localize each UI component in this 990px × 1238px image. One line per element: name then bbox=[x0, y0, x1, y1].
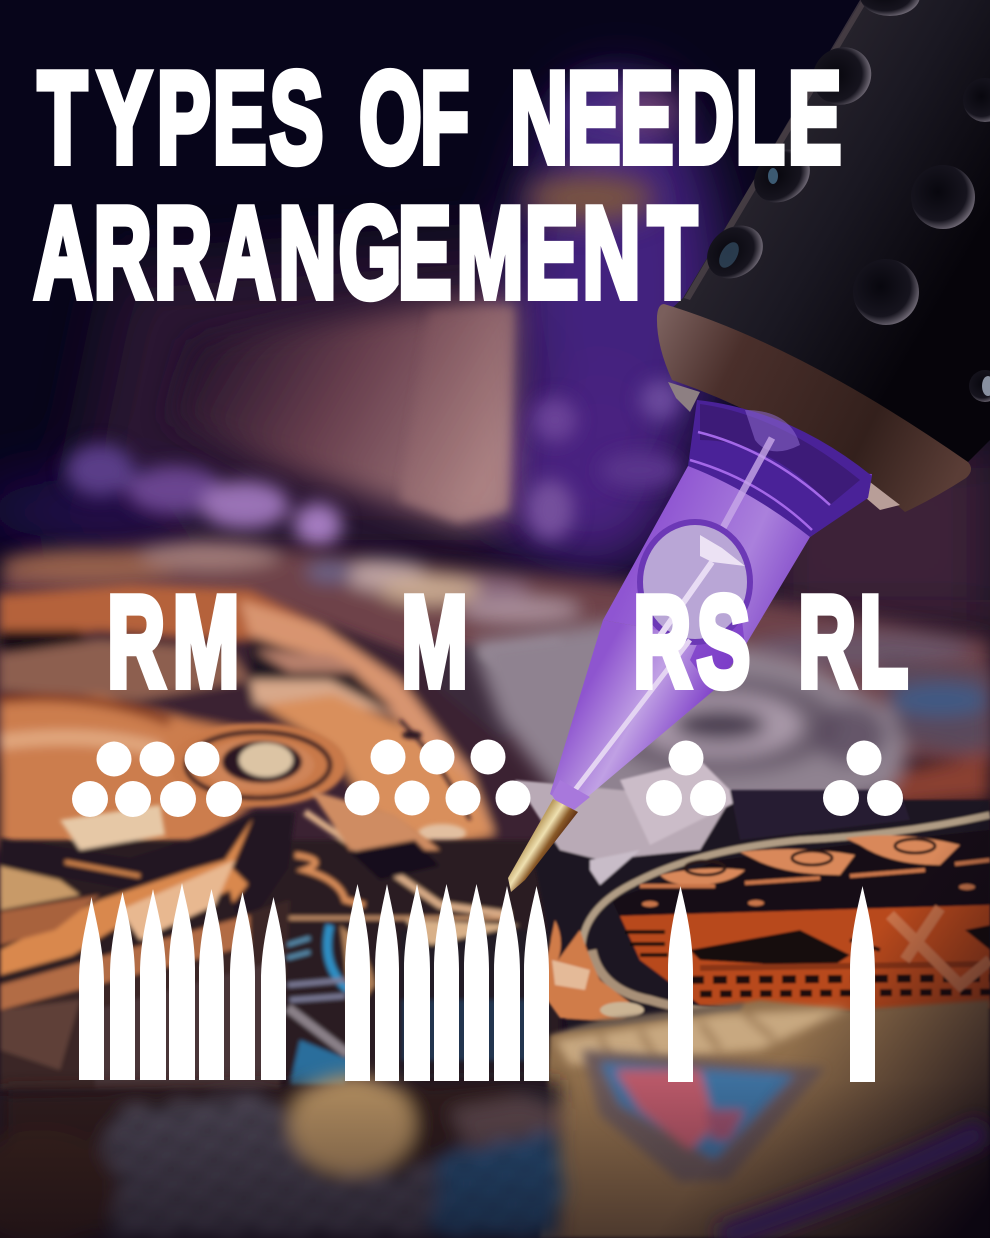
artwork: tan stripes and paper bbox=[540, 1000, 990, 1238]
heading: RL: RL bbox=[798, 569, 908, 714]
tattoo machine copper collar bbox=[657, 304, 971, 512]
icon: RS needle bbox=[668, 886, 693, 1082]
icon: RM needle group bbox=[79, 883, 286, 1080]
icon: RL needle bbox=[850, 886, 875, 1082]
heading: RS: RS bbox=[633, 569, 750, 714]
artwork: right grey swirls bbox=[470, 620, 990, 840]
artwork: upper blurred ink bbox=[0, 585, 580, 900]
ring window bbox=[640, 522, 750, 642]
column: RS bbox=[633, 569, 750, 1082]
title: types of needle arrangement bbox=[34, 45, 841, 325]
icon: RM dot layout bbox=[72, 742, 242, 817]
background: lilac bokeh streak bbox=[66, 380, 680, 547]
artwork: stripes bbox=[555, 1008, 850, 1065]
heading: RM: RM bbox=[107, 569, 239, 714]
icon: M needle group bbox=[345, 884, 549, 1081]
artwork: concentric ring on orange form bbox=[82, 720, 470, 870]
artwork: dark ink with cream outline, swirls and red scales bbox=[515, 760, 990, 1040]
needle cartridge bbox=[550, 382, 900, 810]
gold needle tip bbox=[508, 799, 578, 892]
artwork: left mid orange forms bbox=[0, 790, 560, 1090]
column: RM bbox=[72, 569, 286, 1080]
icon: M dot layout bbox=[344, 740, 530, 816]
icon: RL dot layout bbox=[823, 740, 903, 816]
title: types of needle arrangement: TYPES OF NEEDLE bbox=[38, 45, 841, 190]
icon: glass studs on grip bbox=[697, 0, 990, 402]
column: M bbox=[344, 569, 549, 1081]
heading: M: M bbox=[401, 569, 468, 714]
icon: RS dot layout bbox=[646, 740, 726, 816]
background: blurred table edge bbox=[0, 540, 990, 760]
column: RL bbox=[798, 569, 908, 1082]
artwork: shield emblem bbox=[582, 1050, 825, 1182]
tattoo machine body bbox=[670, 0, 990, 470]
artwork: lower blurred patterned forms bbox=[0, 1075, 565, 1238]
title: types of needle arrangement: ARRANGEMENT bbox=[34, 180, 697, 325]
